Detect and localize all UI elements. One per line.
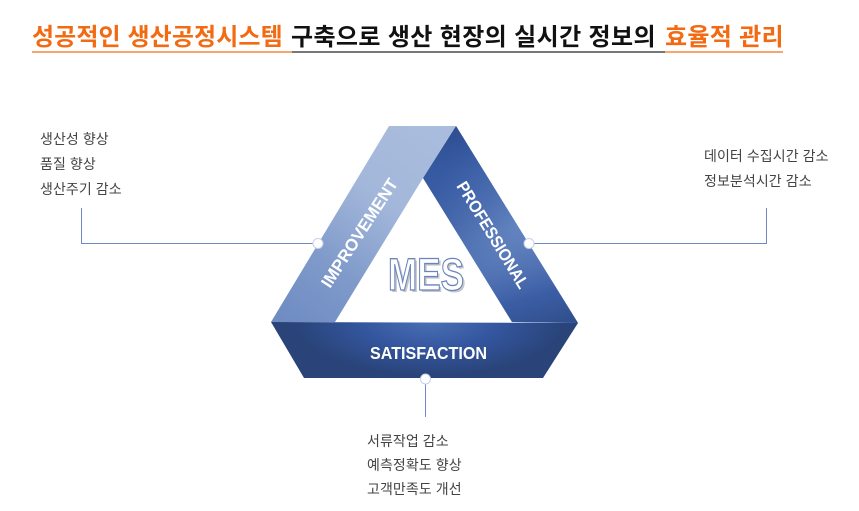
label: professional: PROFESSIONAL [453,178,533,292]
connector dot: right [524,238,534,248]
label: satisfaction: SATISFACTION [370,343,487,363]
leader line: bottom [424,378,426,417]
title: 구축으로 생산 현장의 실시간 정보의 [291,24,656,51]
MES label: MES [388,249,464,300]
text: improvement benefits: 품질 향상 [40,156,96,172]
text: professional benefits: 정보분석시간 감소 [704,173,812,189]
connector dot: left [313,238,323,248]
connector dot: bottom [420,374,430,384]
band: satisfaction [271,322,578,378]
text: professional benefits: 데이터 수집시간 감소 [704,148,829,164]
band: professional [423,126,578,323]
title: 성공적인 생산공정시스템 [32,24,283,51]
title: 효율적 관리 [665,24,784,51]
text: improvement benefits: 생산성 향상 [40,131,109,147]
leader line: left [82,208,318,244]
text: satisfaction benefits: 서류작업 감소 [367,433,449,449]
text: improvement benefits: 생산주기 감소 [40,181,122,197]
label: improvement: IMPROVEMENT [317,175,402,291]
band: improvement [271,126,456,322]
text: professional benefits [704,148,829,189]
leader line: right [529,208,766,244]
text: satisfaction benefits [367,433,462,497]
title [32,24,784,53]
text: improvement benefits [40,131,122,197]
MES label: MES [390,251,466,302]
text: satisfaction benefits: 고객만족도 개선 [367,481,462,497]
text: satisfaction benefits: 예측정확도 향상 [367,457,462,473]
